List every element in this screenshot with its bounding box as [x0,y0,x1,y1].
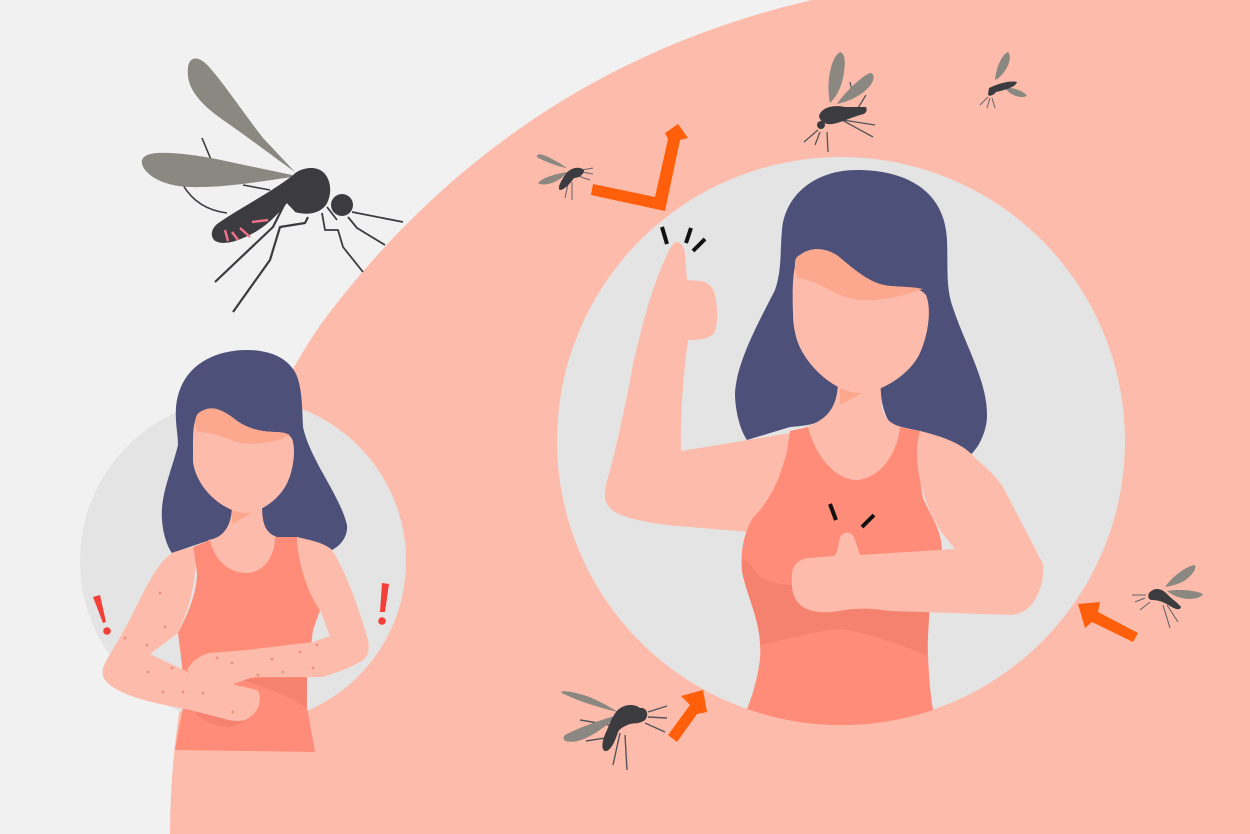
wing two [1005,88,1027,97]
neck and chest [806,380,902,488]
legs [565,168,593,200]
rash dots [124,592,318,713]
wing one [537,154,567,168]
shirt shadow [742,559,930,655]
neck shadow [840,386,866,405]
head [331,194,353,216]
forehead shadow [795,249,923,300]
wing two [1167,590,1203,599]
right arm [792,431,1043,615]
face [793,249,929,393]
legs [804,82,875,152]
body [819,106,867,124]
forehead shadow [195,408,290,444]
legs [1132,595,1178,628]
top [175,537,320,752]
woman: left [103,350,369,752]
mosquito bottom [561,691,667,770]
wing two [563,715,618,742]
mosquito top center [804,52,875,152]
wing one [995,52,1010,80]
arrow: big orange check [591,124,688,211]
arrow: right [1078,602,1138,642]
pain marks [662,227,874,527]
face [193,408,294,513]
wing lower [142,153,292,187]
top [742,427,942,725]
icon: right exclamation mark [378,583,389,625]
wing two [538,172,567,184]
neck [208,505,277,577]
body [988,81,1017,96]
hair [735,170,987,455]
body [1148,589,1181,609]
raised arm [605,242,791,532]
arrow: bottom [668,690,707,742]
body [559,168,584,190]
mosquito left of big arrow [537,154,593,200]
wing one [1165,565,1195,587]
icon: left exclamation mark [93,595,111,635]
head [817,121,825,129]
wing two [837,73,874,104]
mosquito right [1132,565,1203,628]
wing upper [188,58,295,172]
legs [580,706,667,770]
left arm [103,547,260,721]
mosquito top right [980,52,1027,108]
legs [980,97,995,108]
neck shadow [232,511,252,524]
shirt shadow [195,678,307,727]
abdomen markings [225,220,268,241]
hair [162,350,347,553]
body [212,168,330,243]
wing one [561,691,618,712]
legs and antennae [183,138,403,312]
wing one [828,52,845,103]
right arm [187,537,369,687]
panel: large circle right [557,157,1125,725]
body [602,705,647,751]
large mosquito [142,58,403,312]
woman: right [605,170,1043,725]
panel: small circle left [80,398,406,724]
